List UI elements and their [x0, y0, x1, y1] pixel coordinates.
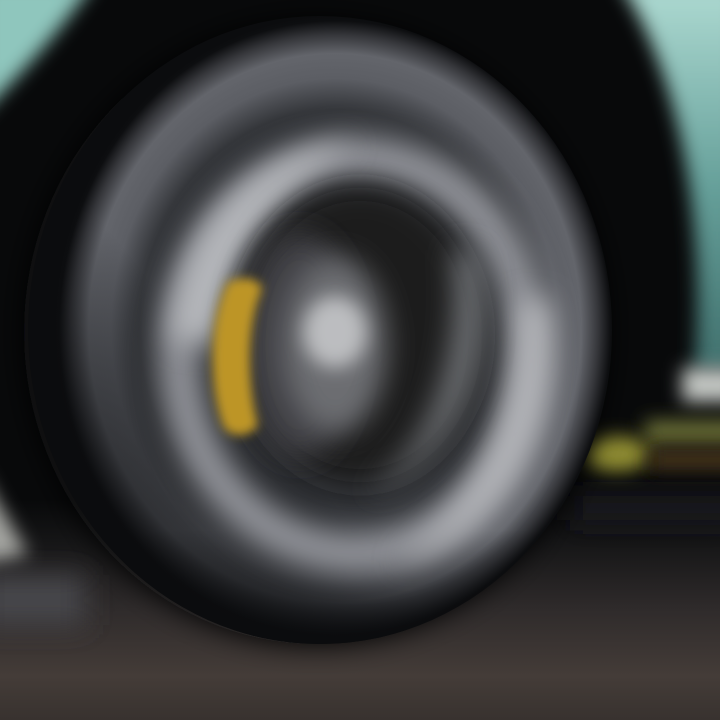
tire: bright lower right rim highlight: [395, 300, 551, 565]
wheel: dark recess: [238, 187, 482, 483]
wheel: grey ring around recess: [365, 250, 485, 495]
ground: wet asphalt: [0, 500, 720, 720]
tire: dark bottom shade: [28, 16, 612, 644]
car body: teal panel top left: [0, 0, 95, 115]
tire: sidewall body with radial shading: [28, 16, 612, 644]
wheel: left inner shade: [242, 233, 358, 457]
wheel: hub highlight: [303, 296, 367, 368]
wheel: hub: [283, 257, 387, 433]
tire: bright upper left rim highlight: [172, 142, 355, 345]
tire: dark left and lower shoulder shade: [28, 16, 612, 644]
tire: bright inner ring: [179, 157, 531, 553]
tire: soft outer shadow: [24, 20, 608, 644]
car body: teal panel right: [618, 0, 720, 372]
ground: light patch at left: [0, 470, 28, 565]
background detail: white patch right: [682, 368, 720, 402]
brake caliper: yellow: [212, 278, 262, 435]
wheel: [238, 187, 485, 495]
tire: [24, 16, 612, 644]
ground: grey strip at left: [0, 575, 85, 625]
background detail: olive and yellow objects right: [570, 420, 720, 521]
